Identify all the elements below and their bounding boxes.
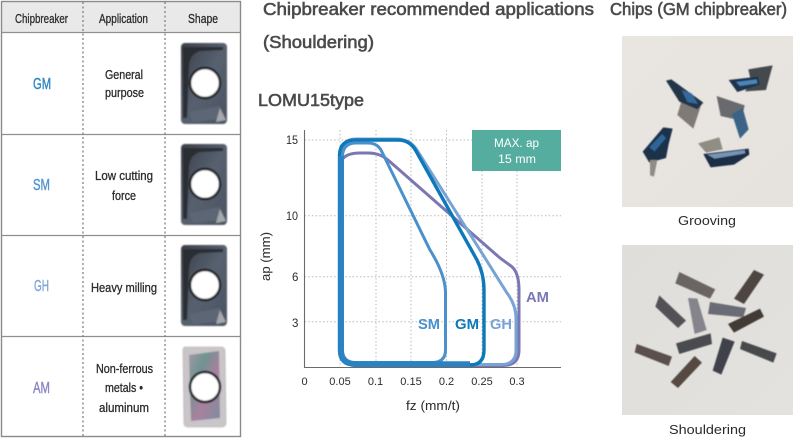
curve: GH bbox=[340, 139, 516, 364]
photo: grooving chips bbox=[622, 36, 793, 207]
x axis numbers: 0.3 bbox=[509, 376, 525, 388]
row: SM: force bbox=[112, 188, 136, 203]
photo: shouldering chips bbox=[622, 245, 793, 415]
callout: max ap bbox=[472, 130, 561, 171]
heading: LOMU15type: LOMU15type bbox=[258, 90, 364, 110]
x axis numbers bbox=[301, 376, 525, 388]
y axis numbers bbox=[286, 135, 298, 330]
row: AM: AM bbox=[33, 380, 50, 397]
x axis numbers: 0.1 bbox=[368, 376, 383, 388]
icon: SM insert bbox=[181, 144, 227, 225]
x axis numbers: 0.05 bbox=[329, 376, 351, 388]
caption: Shouldering: Shouldering bbox=[669, 422, 746, 437]
row: SM: Low cutting bbox=[95, 168, 153, 183]
row: SM bbox=[33, 168, 153, 203]
title: chipbreaker recommended applications: (Shouldering) bbox=[263, 32, 374, 52]
y axis numbers: 15 bbox=[286, 135, 298, 147]
series labels: AM bbox=[526, 290, 549, 306]
row: GH: GH bbox=[34, 278, 49, 295]
icon: GH insert bbox=[181, 245, 227, 326]
row: GH bbox=[34, 278, 157, 295]
x axis label: fz (mm/t) bbox=[406, 399, 460, 413]
callout: max ap: MAX. ap bbox=[494, 136, 539, 150]
icon: GM insert bbox=[181, 43, 227, 124]
y axis numbers: 10 bbox=[286, 211, 298, 223]
header labels: Application bbox=[99, 11, 148, 26]
row: AM bbox=[33, 361, 153, 415]
header labels: Chipbreaker bbox=[15, 11, 68, 26]
series labels: SM bbox=[418, 317, 440, 333]
row: GM: GM bbox=[33, 76, 51, 93]
row: GM: purpose bbox=[105, 85, 144, 100]
row: GM bbox=[33, 67, 144, 100]
header labels bbox=[15, 11, 218, 26]
x axis numbers: 0.2 bbox=[439, 376, 454, 388]
callout: max ap: 15 mm bbox=[498, 152, 536, 166]
row: AM: Non-ferrous bbox=[96, 361, 153, 376]
curve: GM bbox=[340, 140, 484, 365]
chart: chipbreaker application range bbox=[259, 130, 561, 413]
series labels: GH bbox=[490, 317, 512, 333]
series labels bbox=[418, 290, 549, 333]
row: AM: aluminum bbox=[99, 400, 149, 415]
curve: AM bbox=[341, 153, 519, 366]
y axis numbers: 6 bbox=[292, 272, 298, 284]
x axis numbers: 0.15 bbox=[400, 376, 422, 388]
caption: Grooving: Grooving bbox=[678, 213, 736, 228]
panel: chipbreaker table bbox=[1, 2, 241, 437]
axes bbox=[304, 130, 561, 368]
y axis label: ap (mm) bbox=[259, 232, 273, 281]
table header band bbox=[2, 2, 240, 32]
x axis numbers: 0 bbox=[301, 376, 308, 388]
header labels: Shape bbox=[188, 11, 218, 26]
icon: AM insert bbox=[183, 347, 226, 427]
curve: SM bbox=[342, 143, 446, 362]
series labels: GM bbox=[455, 317, 479, 333]
title: chipbreaker recommended applications bbox=[263, 0, 594, 52]
x axis numbers: 0.25 bbox=[471, 376, 493, 388]
y axis numbers: 3 bbox=[292, 318, 298, 330]
row: AM: metals • bbox=[105, 380, 143, 395]
solid overlap band: left and bottom bbox=[341, 156, 470, 364]
row: GH: Heavy milling bbox=[91, 280, 157, 295]
row: SM: SM bbox=[33, 177, 50, 194]
row: GM: General bbox=[105, 67, 143, 82]
